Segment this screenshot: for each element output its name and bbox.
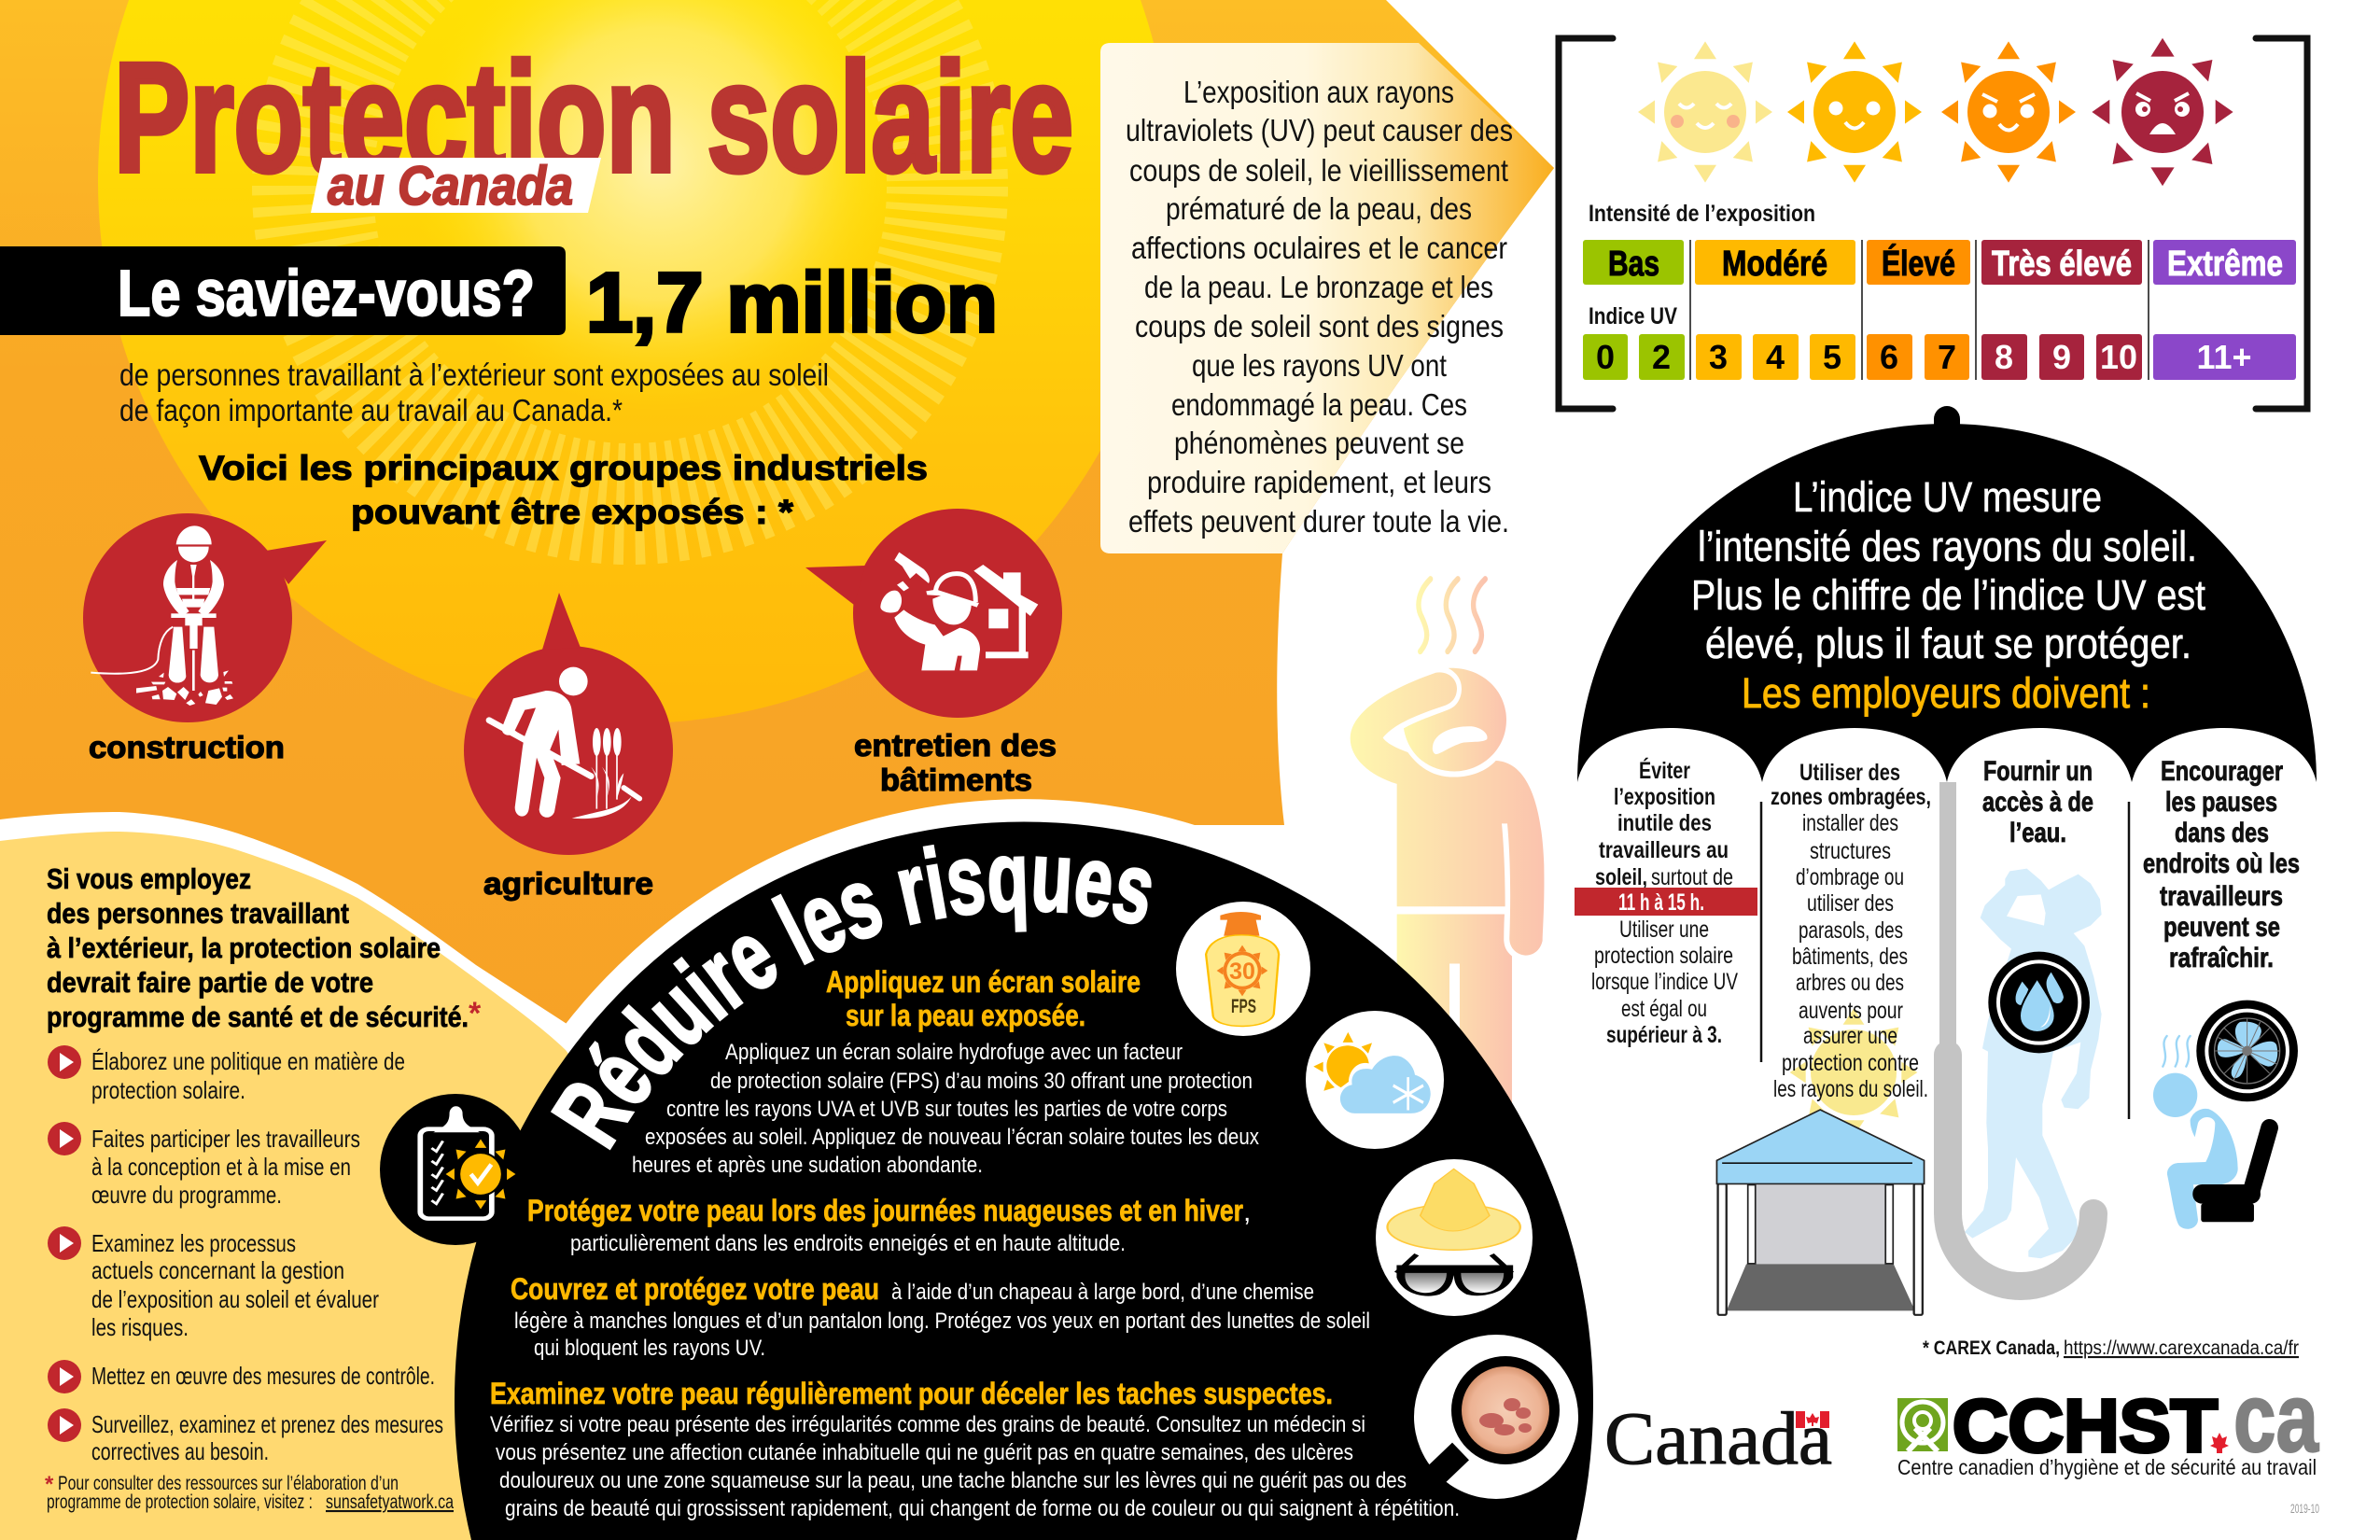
legend: index values: 10 [2100,338,2137,376]
panel: UV explanation callout [1100,43,1554,553]
statistic description: de personnes travaillant à l’extérieur sont exposées au soleil [119,357,829,392]
heading: industrial groups [199,449,928,531]
column: breaks: travailleurs [2160,881,2283,912]
label: exposure intensity: Intensité de l’exposition [1589,201,1815,227]
panel: UV explanation callout: effets peuvent durer toute la vie. [1128,504,1509,539]
umbrella handle [1948,782,2102,1286]
advice: cover up: Couvrez et protégez votre peau [511,1272,879,1306]
column: shade [1771,760,1931,1102]
list: program steps: Faites participer les travailleurs [91,1125,360,1153]
heading: employer program [47,862,469,1033]
legend: index values: 0 [1596,338,1615,376]
column: avoid exposure: supérieur à 3. [1606,1022,1722,1048]
column: water: l’eau. [2009,818,2066,848]
legend: index values: 3 [1709,338,1728,376]
legend: index values: 2 [1652,338,1671,376]
legend: index values: 7 [1938,338,1956,376]
list: program steps: Élaborez une politique en matière de [91,1047,405,1075]
label: agriculture: agriculture [483,866,653,901]
advice: sunscreen: de protection solaire (FPS) d’au moins 30 offrant une protection [710,1069,1253,1094]
sun background [98,0,1171,723]
logo: Canada: Canada [1604,1398,1832,1480]
list: program steps: correctives au besoin. [91,1437,269,1465]
heading: employer program: à l’extérieur, la protection solaire [47,931,441,964]
column: breaks: rafraîchir. [2169,943,2274,973]
risk reduction advice text [490,965,1460,1521]
source note: https://www.carexcanada.ca/fr [2064,1337,2299,1359]
column: shade: structures [1810,838,1891,864]
advice: cover up: légère à manches longues et d’un pantalon long. Protégez vos yeux en portant des lunettes de soleil [514,1309,1370,1334]
label: UV index: Indice UV [1589,303,1677,329]
icon: building maintenance [805,509,1062,718]
column: avoid exposure [1575,757,1757,1048]
legend: intensity levels: Très élevé [1992,245,2132,284]
footnote: resources: * [45,1472,54,1497]
column: avoid exposure: travailleurs au [1599,837,1729,863]
advice: cover up: qui bloquent les rayons UV. [534,1336,765,1361]
column: breaks: dans des [2175,818,2269,848]
footnote: resources: programme de protection solaire, visitez : [47,1491,313,1513]
advice: cloudy days and winter [527,1194,1251,1256]
logo: CCHST: Centre canadien d’hygiène et de sécurité au travail [1897,1455,2317,1479]
legend: index values: 11+ [2196,338,2252,376]
statistic description [119,357,829,427]
footnote: resources: sunsafetyatwork.ca [326,1491,454,1513]
column: avoid exposure: lorsque l’indice UV [1591,969,1738,995]
highlight: 11 h to 15 h [1575,888,1757,916]
column: shade: protection contre [1782,1050,1919,1076]
icon: sun behind tent [1790,1009,1917,1136]
advice: examine skin: Vérifiez si votre peau présente des irrégularités comme des grains de beauté. Consultez un médecin si [490,1412,1365,1437]
column: avoid exposure: est égal ou [1621,996,1707,1022]
column: shade: d’ombrage ou [1796,864,1904,890]
subtitle: au Canada: au Canada [328,156,573,217]
advice: cover up: à l’aide d’un chapeau à large bord, d’une chemise [891,1280,1314,1305]
category separators [1690,240,2149,380]
legend: index values: 9 [2052,338,2071,376]
panel: UV explanation callout: phénomènes peuvent se [1174,426,1464,460]
panel: UV explanation callout: coups de soleil, le vieillissement [1129,153,1508,188]
advice: examine skin: vous présentez une affection cutanée inhabituelle qui ne guérit pas en quatre semaines, des ulcères [496,1440,1353,1465]
heading: employer program: des personnes travaillant [47,897,349,930]
list: program steps: les risques. [91,1313,189,1341]
panel: UV explanation callout: prématuré de la peau, des [1166,191,1472,226]
list: program steps: à la conception et à la mise en [91,1153,351,1181]
advice: examine skin: Examinez votre peau régulièrement pour déceler les taches suspectes. [490,1377,1333,1410]
list: program steps: Examinez les processus [91,1229,296,1257]
source note [1923,1337,2299,1359]
column: breaks [2143,756,2300,973]
icon: sun and snow cloud [1306,1011,1444,1149]
umbrella text: élevé, plus il faut se protéger. [1705,620,2191,667]
icon: sunscreen bottle: FPS [1231,996,1256,1017]
icon: fan and seated worker [2153,1001,2298,1229]
icon: hat and sunglasses [1376,1159,1533,1316]
statistic: 1,7 million: 1,7 million [586,257,998,350]
legend: intensity levels: Élevé [1882,243,1955,284]
heading: employer program: devrait faire partie de votre [47,966,373,999]
advice: sunscreen: heures et après une sudation abondante. [632,1153,983,1178]
column: avoid exposure: soleil, [1595,864,1647,890]
advice: sunscreen: exposées au soleil. Appliquez de nouveau l’écran solaire toutes les deux [645,1125,1259,1150]
advice: cover up [511,1272,1370,1361]
column: avoid exposure: surtout de [1651,864,1733,890]
column: water [1982,756,2093,848]
footnote: resources [45,1472,454,1513]
orange background [0,0,1554,1073]
figure: overheated worker [1351,579,1544,1131]
umbrella canopy [1577,406,2317,782]
bullet: red arrows [48,1045,81,1442]
heading: industrial groups: pouvant être exposés : * [351,493,794,531]
umbrella text: l’intensité des rayons du soleil. [1698,523,2197,570]
icon: construction [83,513,327,722]
icon: clipboard with sun [380,1094,531,1245]
employer program text [45,862,482,1513]
column: avoid exposure: protection solaire [1594,943,1733,969]
advice: sunscreen: Appliquez un écran solaire [826,965,1141,999]
column: avoid exposure: Éviter [1639,757,1690,784]
panel: UV explanation callout: L’exposition aux rayons [1183,75,1454,109]
advice: sunscreen: contre les rayons UVA et UVB sur toutes les parties de votre corps [666,1097,1227,1122]
legend: intensity levels: Modéré [1722,245,1827,284]
date code: 2019-10 [2290,1501,2319,1516]
umbrella text [1691,473,2205,717]
white ring around risks section [436,799,1612,1540]
icon: sunscreen bottle [1176,902,1310,1036]
highlight: 11 h to 15 h: 11 h à 15 h. [1618,889,1704,916]
column: shade: utiliser des [1807,890,1894,917]
advice: examine skin: grains de beauté qui grossissent rapidement, qui changent de forme ou de couleur ou qui saignent à répétition. [505,1496,1460,1521]
column: water: accès à de [1982,787,2093,818]
heading: employer program: programme de santé et de sécurité. [47,1001,469,1033]
label: building maintenance [854,728,1057,797]
icon: low exposure sun [1638,41,1772,183]
legend: index values [1583,334,2296,380]
panel: UV explanation callout: coups de soleil sont des signes [1135,309,1504,343]
legend: index values: 6 [1880,338,1898,376]
list: program steps: Surveillez, examinez et prenez des mesures [91,1410,443,1438]
panel: UV explanation callout: affections oculaires et le cancer [1131,231,1507,265]
heading: Réduire les risques: Réduire les risques [551,844,1152,1150]
legend: intensity levels: Bas [1608,245,1659,284]
umbrella text: Les employeurs doivent : [1742,669,2150,717]
list: program steps: de l’exposition au soleil et évaluer [91,1285,379,1313]
icon: sunscreen bottle: 30 [1229,959,1255,985]
icon: magnifying glass on skin [1414,1335,1578,1499]
advice: cloudy days and winter: particulièrement dans les endroits enneigés et en haute altitude. [570,1231,1126,1256]
column: breaks: peuvent se [2163,912,2280,943]
umbrella text: Plus le chiffre de l’indice UV est [1691,571,2205,619]
column: shade: zones ombragées, [1771,784,1931,810]
list: program steps: actuels concernant la gestion [91,1256,344,1284]
banner: Le saviez-vous: Le saviez-vous? [118,257,535,329]
column: avoid exposure: l’exposition [1614,784,1715,810]
logo: CCHST: ca [2233,1364,2319,1473]
legend: intensity levels [1583,240,2296,285]
icon: high exposure sun [1941,41,2076,183]
column separators [1761,802,2129,1119]
legend: index values: 4 [1766,338,1785,376]
banner: Le saviez-vous [0,246,566,335]
legend: index values: 5 [1823,338,1841,376]
advice: sunscreen [632,965,1259,1178]
panel: UV explanation callout: produire rapidement, et leurs [1147,465,1491,499]
heading: industrial groups: Voici les principaux groupes industriels [199,449,928,487]
panel: risk reduction black arc [455,821,1593,1540]
title: Protection solaire [114,32,1073,204]
panel: UV explanation callout: que les rayons UV ont [1192,348,1447,383]
panel: UV explanation callout: ultraviolets (UV) peut causer des [1126,113,1513,147]
icon: moderate exposure sun [1787,41,1922,183]
legend: index values: 8 [1995,338,2013,376]
panel: employer section background [0,832,653,1540]
advice: examine skin [490,1377,1460,1521]
label: construction: construction [89,730,285,764]
advice: sunscreen: sur la peau exposée. [846,999,1085,1032]
column: shade: auvents pour [1799,998,1903,1024]
icon: very high exposure sun [2092,38,2233,186]
list: program steps: Mettez en œuvre des mesures de contrôle. [91,1362,435,1390]
panel: UV explanation callout: de la peau. Le bronzage et les [1144,270,1493,304]
figure: worker drinking water [1965,869,2102,1258]
legend: intensity levels: Extrême [2167,245,2283,284]
title [114,32,1073,217]
column: shade: installer des [1802,810,1898,836]
column: water: Fournir un [1983,756,2093,787]
column: shade: bâtiments, des [1792,944,1908,970]
umbrella text: L’indice UV mesure [1793,473,2102,521]
footnote: resources: Pour consulter des ressources sur l’élaboration d’un [58,1473,399,1494]
white band above employer section [0,812,653,1540]
icon: agriculture [464,593,673,855]
statistic description: de façon importante au travail au Canada.* [119,393,623,427]
icon: shade tent [1716,1110,1925,1315]
icon: water drops [1988,952,2090,1053]
column: breaks: Encourager [2161,756,2283,787]
heading: employer program: Si vous employez [47,862,251,895]
logo: CCHST: CCHST [1953,1384,2218,1467]
column: shade: parasols, des [1799,917,1903,944]
asterisk: * [469,996,482,1031]
list: program steps: œuvre du programme. [91,1181,282,1209]
advice: cloudy days and winter: , [1243,1197,1251,1227]
advice: cloudy days and winter: Protégez votre peau lors des journées nuageuses et en hiver [527,1194,1243,1227]
column: avoid exposure: Utiliser une [1619,917,1709,943]
UV index chart [1559,38,2307,409]
column: breaks: les pauses [2165,787,2277,818]
logo: CCHST [1897,1364,2319,1479]
advice: examine skin: douloureux ou une zone squameuse sur la peau, une tache blanche sur les lèvres qui ne guérit pas ou des [499,1468,1407,1493]
column: breaks: endroits où les [2143,848,2300,879]
source note: * CAREX Canada, [1923,1337,2060,1359]
label: building maintenance: entretien des [854,728,1057,763]
list: program steps [91,1047,443,1465]
panel: UV explanation callout: endommagé la peau. Ces [1171,387,1467,422]
column: shade: assurer une [1803,1023,1897,1049]
list: program steps: protection solaire. [91,1076,245,1104]
column: shade: arbres ou des [1796,970,1904,996]
column: shade: les rayons du soleil. [1773,1076,1928,1102]
advice: sunscreen: Appliquez un écran solaire hydrofuge avec un facteur [725,1040,1183,1065]
label: building maintenance: bâtiments [880,763,1032,797]
column: shade: Utiliser des [1799,760,1900,786]
column: avoid exposure: inutile des [1617,810,1712,836]
